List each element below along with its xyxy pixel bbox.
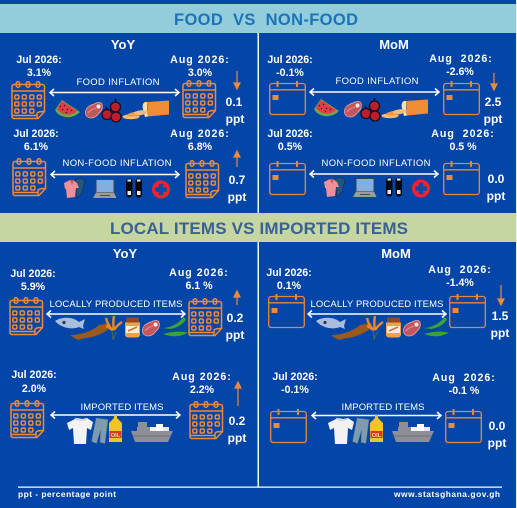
- August imported value: -0.1 %: [449, 385, 480, 397]
- August non-food value: 0.5 %: [449, 141, 477, 153]
- July food value: Jul 2026:: [267, 54, 313, 66]
- change: 0.2 ppt: [228, 414, 246, 445]
- August non-food value: [170, 128, 230, 153]
- August food value: 3.0%: [188, 67, 213, 79]
- label: food inflation: FOOD INFLATION: [336, 76, 419, 87]
- icon: calendar July: [11, 401, 44, 438]
- double arrow: [47, 310, 185, 318]
- August food value: Aug 2026:: [429, 53, 493, 65]
- change: 1.5 ppt: ppt: [491, 326, 509, 340]
- icons: local items: [55, 316, 188, 340]
- July local value: [266, 267, 312, 292]
- August non-food value: [431, 128, 495, 153]
- arrow: down: [491, 73, 497, 90]
- icon: calendar July: [270, 81, 305, 114]
- August local value: -1.4%: [446, 277, 474, 289]
- change: 0.0 ppt: ppt: [488, 436, 506, 450]
- icons: food items: [55, 99, 169, 122]
- icon: calendar July: [269, 294, 304, 328]
- heading: food vs non-food: FOOD VS NON-FOOD: [174, 11, 358, 29]
- icon: calendar July: [271, 409, 306, 442]
- July imported value: [11, 369, 57, 395]
- icon: calendar August: [450, 294, 485, 328]
- July non-food value: [13, 128, 59, 153]
- July local value: Jul 2026:: [266, 267, 312, 279]
- double arrow: [310, 88, 439, 96]
- change: 0.1 ppt: [226, 95, 244, 126]
- August imported value: Aug 2026:: [172, 371, 232, 383]
- August food value: Aug 2026:: [170, 54, 230, 66]
- August imported value: [432, 372, 496, 397]
- arrow: up: [234, 291, 240, 305]
- change: 2.5 ppt: ppt: [484, 112, 502, 126]
- change: 1.5 ppt: [491, 309, 509, 340]
- arrow: up: [235, 382, 241, 406]
- label: locally produced items: LOCALLY PRODUCED ITEMS: [310, 299, 444, 310]
- heading: YoY: YoY: [111, 37, 135, 52]
- change: 0.1 ppt: ppt: [226, 112, 244, 126]
- August local value: [428, 264, 492, 289]
- icon: calendar July: [270, 161, 305, 194]
- July local value: Jul 2026:: [10, 268, 56, 280]
- change: 0.0 ppt: [487, 172, 505, 203]
- July food value: [16, 54, 62, 79]
- double arrow: [310, 170, 438, 178]
- July non-food value: 0.5%: [278, 141, 303, 153]
- icon: calendar August: [190, 402, 222, 438]
- change: 0.2 ppt: 0.2: [227, 311, 244, 325]
- July non-food value: Jul 2026:: [267, 128, 313, 140]
- double arrow: [51, 171, 179, 178]
- panel: food vs non-food YoY: [12, 37, 246, 204]
- icon: calendar August: [183, 81, 216, 118]
- icon: calendar August: [446, 409, 481, 442]
- panel: local vs imported YoY: [10, 246, 246, 445]
- change: 2.5 ppt: 2.5: [485, 95, 502, 109]
- July non-food value: 6.1%: [24, 141, 49, 153]
- August imported value: Aug 2026:: [432, 372, 496, 384]
- August imported value: [172, 371, 232, 396]
- panel: local vs imported MoM: [266, 246, 509, 450]
- label: non-food inflation: NON-FOOD INFLATION: [62, 158, 172, 169]
- arrow: down: [234, 71, 240, 89]
- change: 0.0 ppt: [488, 419, 506, 450]
- July local value: 5.9%: [21, 281, 46, 293]
- icons: local items: [316, 316, 449, 340]
- arrow: down: [498, 285, 504, 305]
- August non-food value: Aug 2026:: [431, 128, 495, 140]
- footer: website: www.statsghana.gov.gh: [393, 489, 500, 499]
- icon: calendar August: [189, 299, 222, 336]
- icon: calendar July: [10, 298, 42, 334]
- label: imported items: IMPORTED ITEMS: [342, 402, 424, 413]
- change: 0.0 ppt: 0.0: [489, 419, 506, 433]
- July local value: 0.1%: [277, 280, 302, 292]
- icon: calendar August: [444, 161, 479, 194]
- July imported value: 2.0%: [22, 383, 47, 395]
- change: 0.0 ppt: 0.0: [488, 172, 505, 186]
- change: 0.7 ppt: 0.7: [229, 173, 246, 187]
- icon: calendar July: [12, 82, 44, 118]
- double arrow: [312, 412, 441, 419]
- August non-food value: Aug 2026:: [170, 128, 230, 140]
- July imported value: [272, 371, 318, 396]
- July food value: 3.1%: [27, 67, 52, 79]
- section band: food vs non-food: [0, 4, 516, 33]
- panel: food vs non-food MoM: [267, 37, 505, 203]
- heading: YoY: YoY: [113, 246, 137, 261]
- change: 0.2 ppt: [226, 311, 244, 342]
- icons: non-food items: [324, 177, 430, 198]
- change: 0.0 ppt: ppt: [487, 189, 505, 203]
- icons: food items: [314, 98, 428, 121]
- footnote: ppt definition: ppt - percentage point: [18, 489, 116, 499]
- change: 0.2 ppt: 0.2: [229, 414, 246, 428]
- August local value: 6.1 %: [185, 280, 213, 292]
- arrow: up: [234, 151, 240, 167]
- July food value: Jul 2026:: [16, 54, 62, 66]
- double arrow: [308, 310, 446, 318]
- July non-food value: Jul 2026:: [13, 128, 59, 140]
- label: imported items: IMPORTED ITEMS: [80, 402, 164, 413]
- heading: MoM: MoM: [379, 37, 409, 52]
- August food value: [429, 53, 493, 78]
- icon: calendar July: [13, 159, 46, 196]
- July non-food value: [267, 128, 313, 153]
- July imported value: -0.1%: [281, 384, 309, 396]
- change: 0.2 ppt: ppt: [226, 328, 244, 342]
- July local value: [10, 268, 56, 293]
- change: 0.7 ppt: [228, 173, 246, 204]
- double arrow: [51, 412, 180, 418]
- change: 0.1 ppt: 0.1: [226, 95, 243, 109]
- change: 2.5 ppt: [484, 95, 502, 126]
- icons: imported items: [328, 415, 434, 444]
- July imported value: Jul 2026:: [272, 371, 318, 383]
- label: food inflation: FOOD INFLATION: [76, 77, 160, 88]
- heading: local items vs imported items: LOCAL ITEMS VS IMPORTED ITEMS: [110, 219, 408, 238]
- double arrow: [50, 89, 179, 96]
- August food value: -2.6%: [446, 66, 474, 78]
- icon: calendar August: [444, 81, 479, 114]
- July food value: -0.1%: [276, 67, 304, 79]
- change: 0.7 ppt: ppt: [228, 190, 246, 204]
- August local value: [169, 267, 229, 292]
- label: non-food inflation: NON-FOOD INFLATION: [322, 158, 431, 169]
- August food value: [170, 54, 230, 79]
- change: 0.2 ppt: ppt: [228, 431, 246, 445]
- change: 1.5 ppt: 1.5: [492, 309, 509, 323]
- August local value: Aug 2026:: [169, 267, 229, 279]
- section band: local vs imported: [0, 213, 516, 242]
- label: locally produced items: LOCALLY PRODUCED ITEMS: [50, 299, 182, 310]
- August imported value: 2.2%: [190, 384, 215, 396]
- August local value: Aug 2026:: [428, 264, 492, 276]
- heading: MoM: MoM: [381, 246, 411, 261]
- icons: imported items: [67, 415, 173, 444]
- icon: calendar August: [186, 161, 218, 198]
- icons: non-food items: [64, 178, 170, 198]
- August non-food value: 6.8%: [188, 141, 213, 153]
- July food value: [267, 54, 313, 79]
- July imported value: Jul 2026:: [11, 369, 57, 381]
